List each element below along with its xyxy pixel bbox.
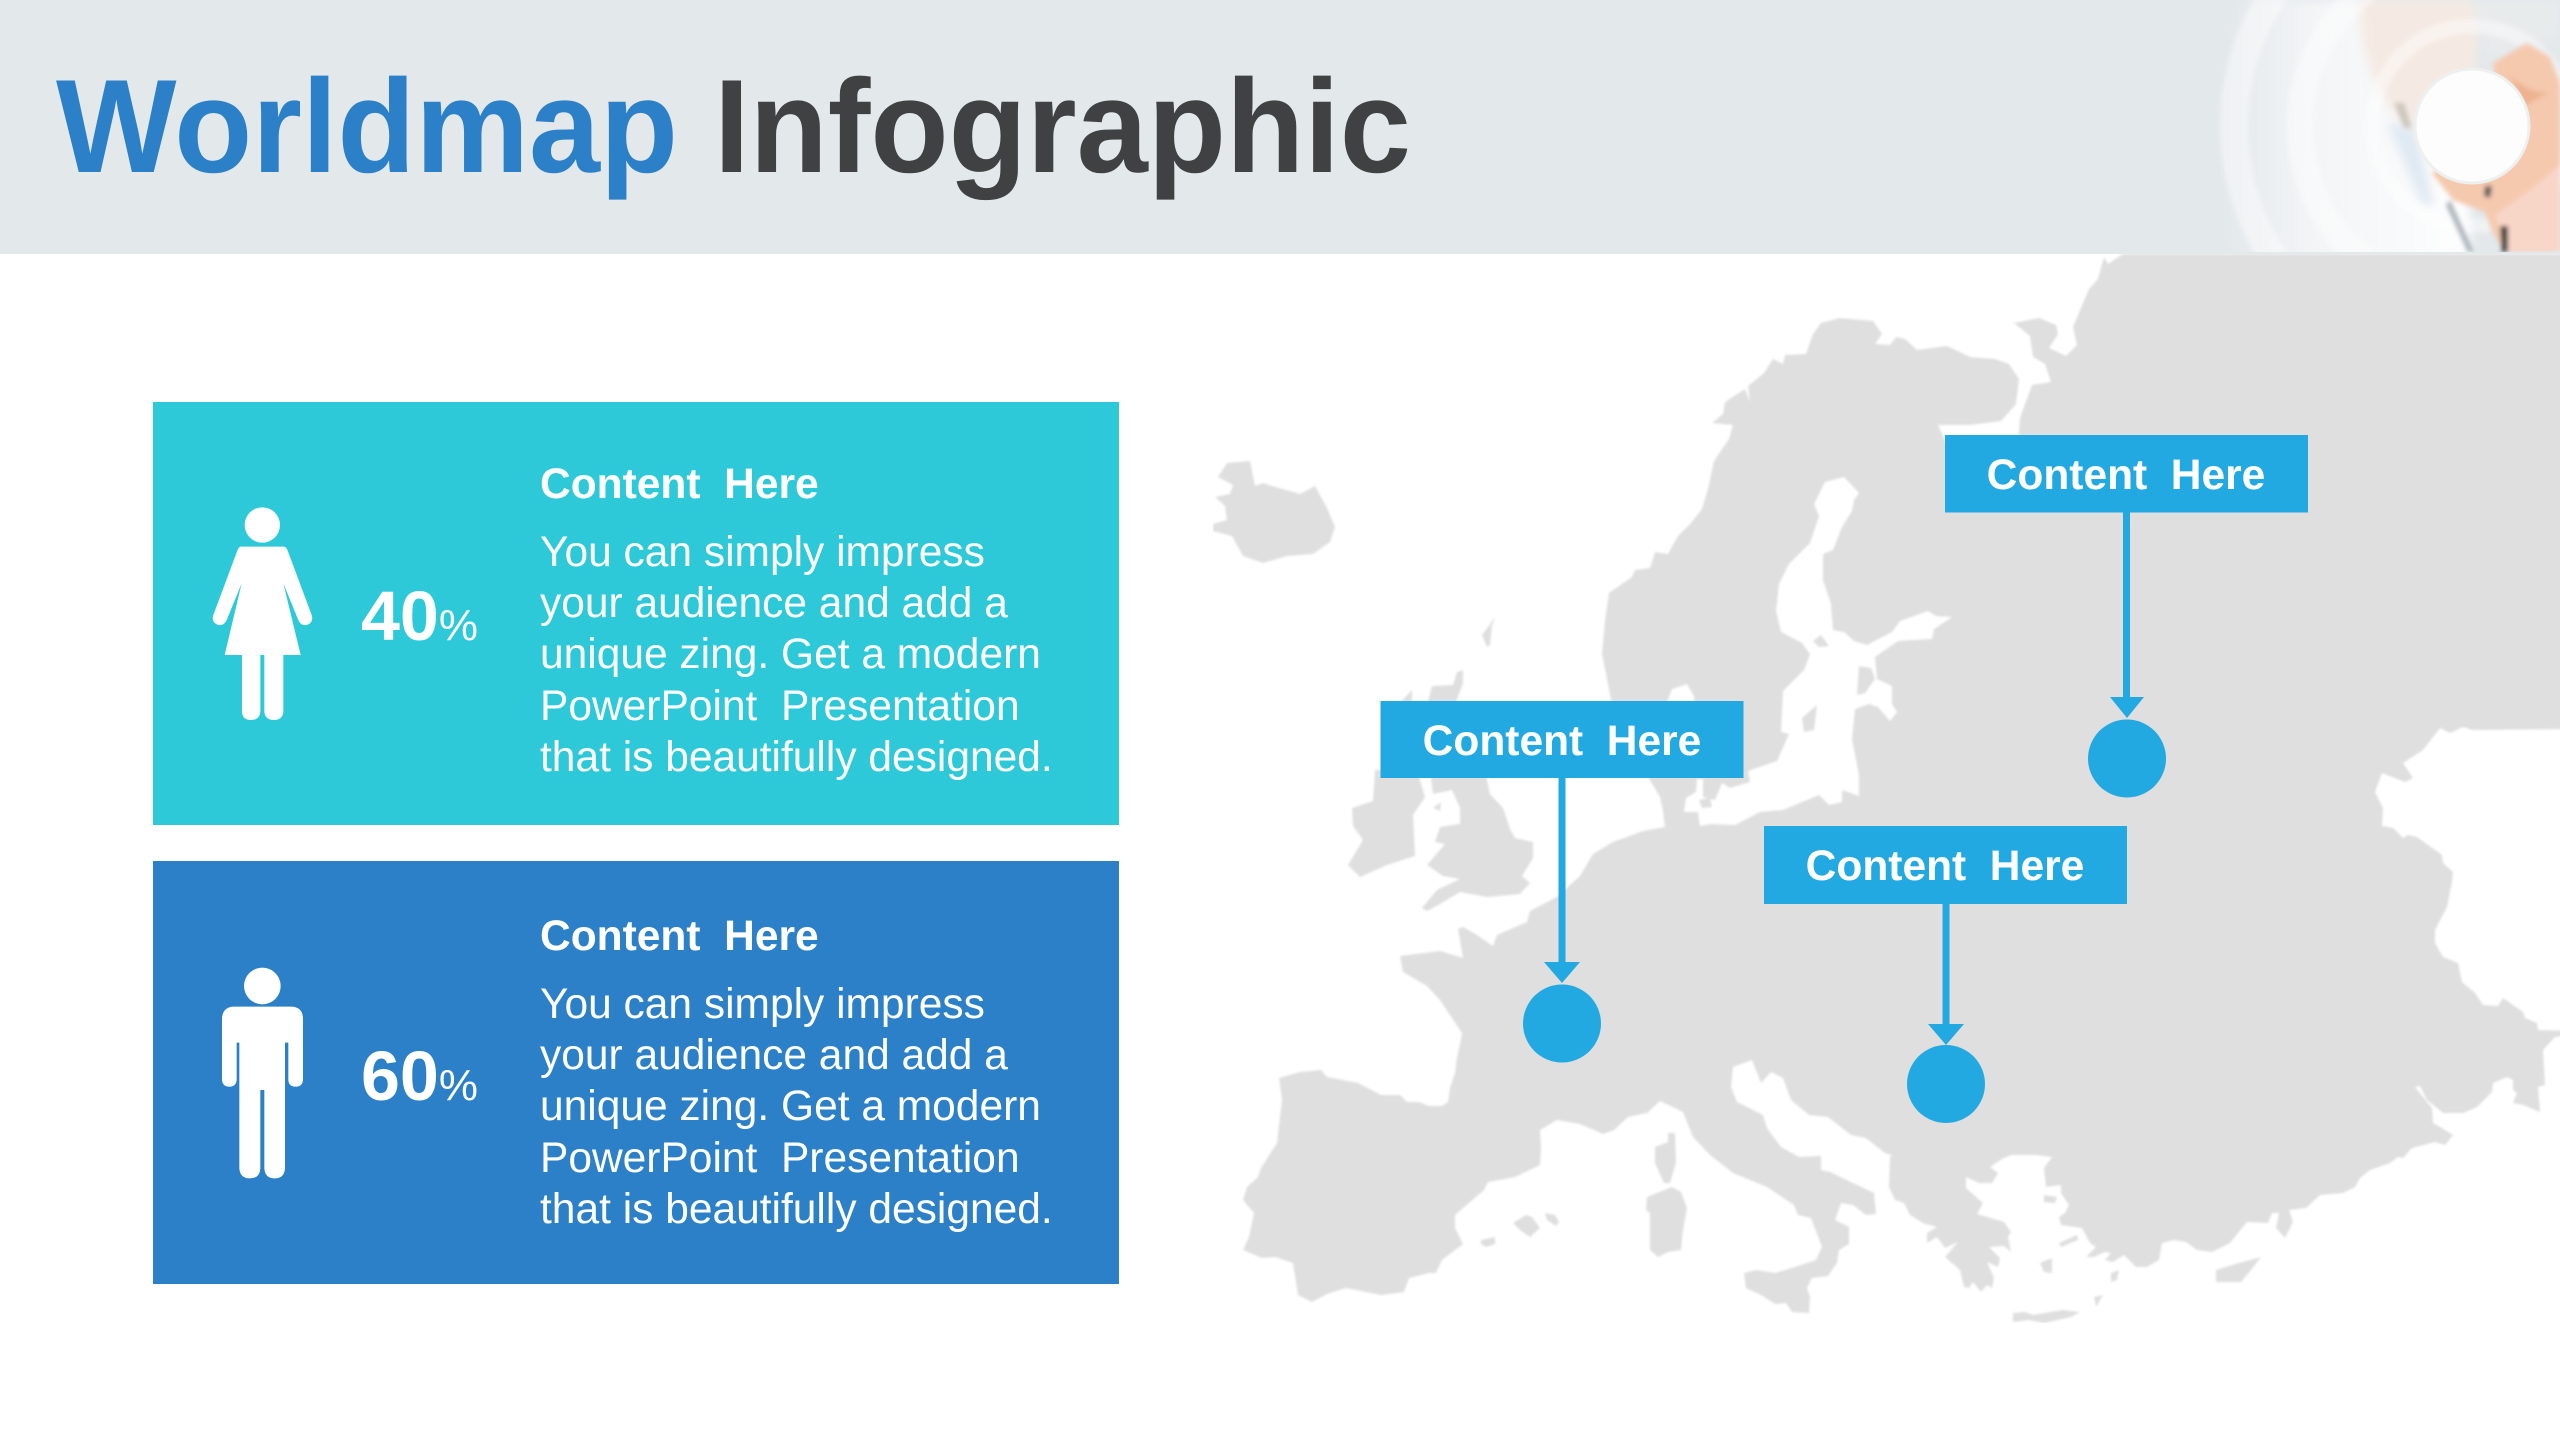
icon: man: [222, 968, 303, 1178]
callout: south-east marker: [1764, 826, 2127, 1123]
arrow: [2110, 512, 2144, 718]
panel body text: your audience and add a: [540, 580, 1008, 627]
arrow: [1544, 778, 1580, 983]
icon: woman: [213, 507, 312, 720]
panel body text: unique zing. Get a modern: [540, 631, 1041, 678]
panel body text: your audience and add a: [540, 1032, 1008, 1079]
callout box: [1945, 435, 2308, 512]
panel body text: [540, 981, 1053, 1233]
title: [56, 53, 1411, 201]
panel body text: that is beautifully designed.: [540, 734, 1053, 781]
callout box: [1380, 701, 1744, 778]
marker dot: [1523, 984, 1601, 1062]
callout: north-east marker: [1945, 435, 2308, 798]
callout label: Content Here: [1987, 452, 2265, 499]
panel body text: PowerPoint Presentation: [540, 1135, 1020, 1182]
callout label: Content Here: [1423, 718, 1701, 765]
marker dot: [2088, 720, 2166, 798]
panel: men 60%: [153, 861, 1119, 1284]
header band: [0, 0, 2560, 254]
islands: Baltic: [1699, 635, 1875, 808]
panel heading: Content Here: [540, 461, 819, 508]
panel: women 40%: [153, 402, 1119, 825]
panel heading: Content Here: [540, 913, 819, 960]
island: Great Britain: [1398, 670, 1533, 911]
panel body text: You can simply impress: [540, 981, 985, 1028]
stat: 40%: 40%: [361, 577, 478, 655]
map of Europe: [1213, 254, 2560, 1323]
stat: 60%: 60%: [361, 1037, 478, 1115]
title: Infographic: [714, 53, 1411, 201]
marker dot: [1907, 1045, 1985, 1123]
callout label: Content Here: [1806, 843, 2084, 890]
title: Worldmap: [56, 53, 678, 201]
header photo: doctor with stethoscope: [2222, 0, 2560, 252]
island: Ireland: [1348, 770, 1425, 877]
callout box: [1764, 826, 2127, 904]
islands: Mediterranean: [1481, 1133, 2261, 1323]
island: Iceland: [1213, 461, 1335, 563]
panel body text: PowerPoint Presentation: [540, 683, 1020, 730]
panel body text: that is beautifully designed.: [540, 1186, 1053, 1233]
islands: Faroes: [1482, 617, 1495, 647]
arrow: [1928, 904, 1964, 1045]
panel body text: unique zing. Get a modern: [540, 1083, 1041, 1130]
callout: west marker: [1380, 701, 1744, 1062]
panel body text: You can simply impress: [540, 529, 985, 576]
panel body text: [540, 529, 1053, 781]
